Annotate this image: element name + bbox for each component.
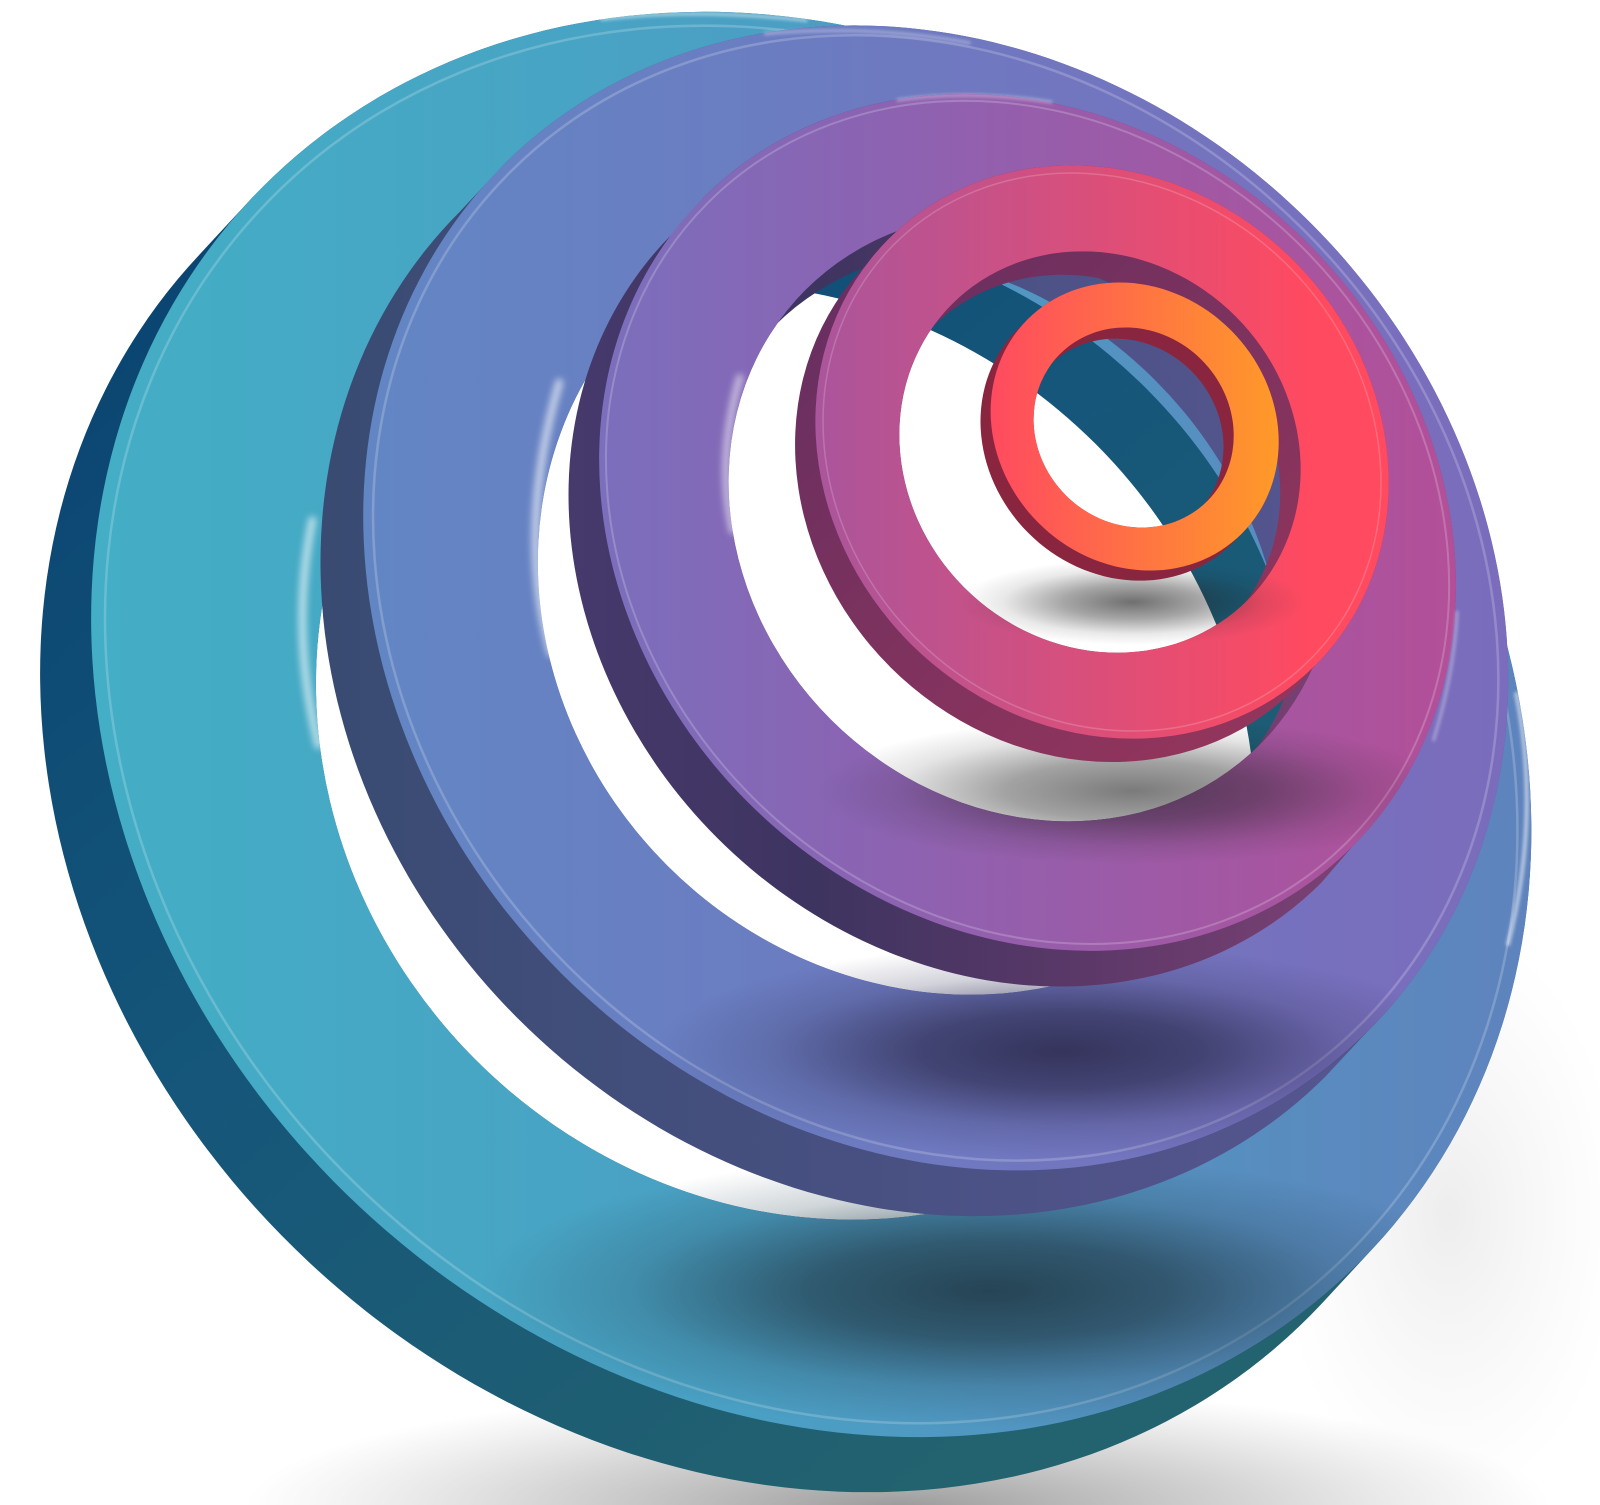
ring 2 cast shadow: [697, 958, 1387, 1146]
ring 3 side wall: [569, 94, 1456, 987]
rim glints: [602, 14, 1527, 944]
ring 4 cast shadow: [976, 566, 1290, 641]
ring 3: purple disc: [568, 94, 1456, 986]
soft hole rim glows: [302, 378, 740, 745]
ring 2 side wall: [320, 25, 1508, 1216]
ring 1 cast shadow: [528, 1176, 1388, 1416]
ring 4 side wall: [795, 165, 1389, 762]
ring 3 cast shadow: [853, 728, 1404, 854]
ring 5: coral-orange centre ring: [980, 282, 1279, 581]
ring 4 front face: [815, 165, 1389, 739]
ring 2: blue-violet disc: [320, 25, 1508, 1216]
floor shadow: [245, 923, 1600, 1505]
ring 5 front face: [991, 282, 1279, 571]
ring 4: magenta-coral disc: [795, 165, 1389, 762]
ring 5 side wall: [980, 282, 1279, 581]
ring 3 front face: [599, 94, 1456, 951]
ring 2 front face: [363, 25, 1508, 1170]
